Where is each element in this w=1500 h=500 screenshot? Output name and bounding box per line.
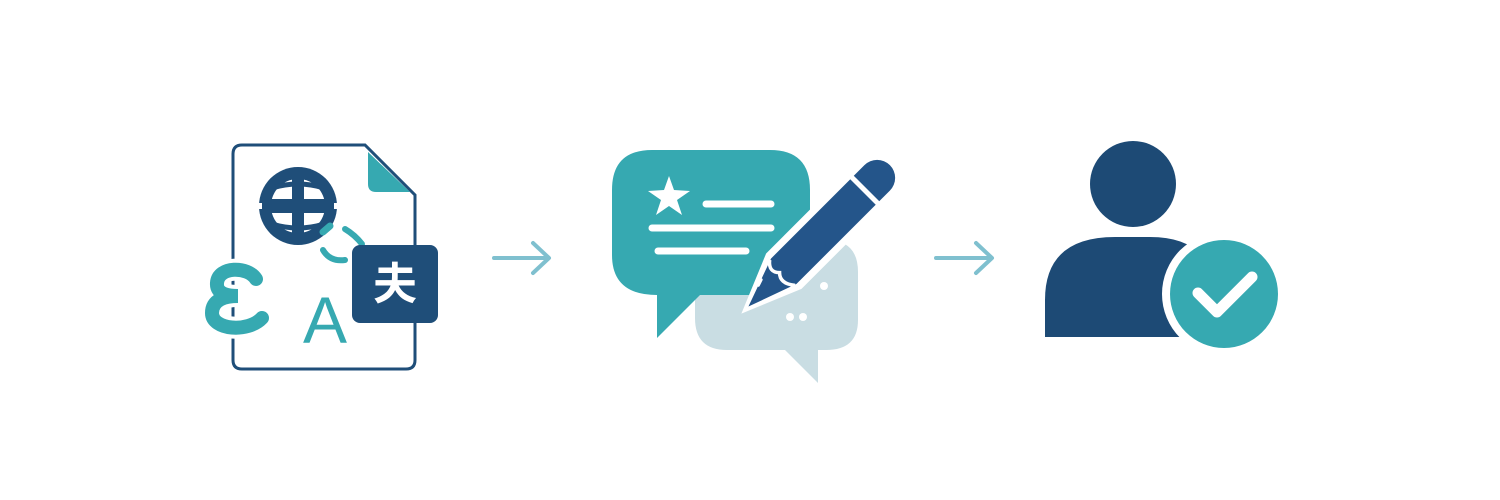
document outline — [233, 145, 415, 369]
epsilon letter: ε — [234, 299, 235, 301]
letter A: A — [303, 283, 347, 357]
character box: 夫 — [373, 260, 417, 309]
text lines — [652, 204, 771, 251]
pencil — [724, 143, 912, 331]
exchange arrows — [345, 229, 362, 244]
teal bubble — [612, 150, 810, 338]
dots — [820, 282, 828, 290]
check badge — [1162, 232, 1286, 356]
head — [1090, 141, 1176, 227]
icon: translation document — [212, 145, 438, 369]
arrow 1 — [494, 243, 549, 273]
icon: feedback bubbles with pencil — [612, 143, 912, 383]
character box — [352, 245, 438, 323]
globe — [254, 167, 342, 245]
epsilon letter — [212, 270, 262, 328]
star — [648, 176, 690, 215]
icon: verified user — [1045, 141, 1286, 356]
body — [1045, 237, 1215, 337]
folded corner — [368, 152, 410, 192]
arrow 2 — [936, 243, 992, 273]
light bubble — [695, 240, 858, 383]
